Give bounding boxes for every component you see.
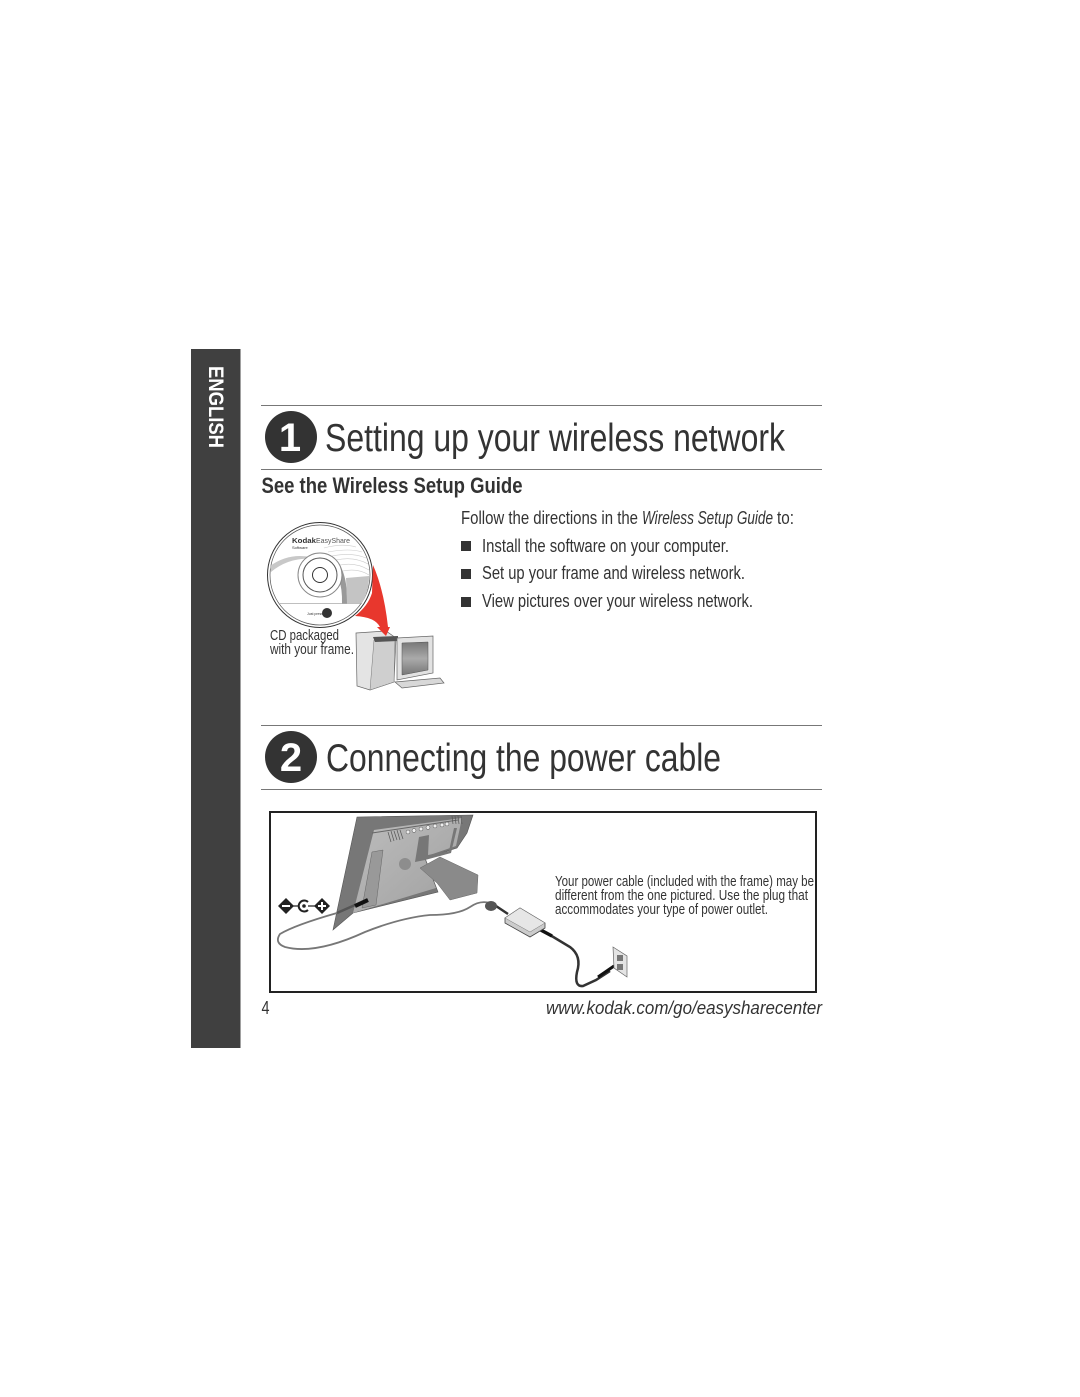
heading: step 1: 1 xyxy=(279,416,301,460)
hinge bracket xyxy=(415,828,457,862)
heading: step 1 xyxy=(265,411,785,463)
footer URL: www.kodak.com/go/easysharecenter xyxy=(546,997,823,1018)
icon: software CD: Software xyxy=(292,545,309,550)
icon: software CD: Just press xyxy=(307,612,323,616)
wall outlet xyxy=(613,947,627,977)
sidebar: language tab xyxy=(191,349,240,1048)
arrow: CD to computer xyxy=(355,565,390,636)
icon: computer xyxy=(356,631,444,690)
frame back xyxy=(333,815,478,930)
text block: directions list: View pictures over your wireless network. xyxy=(482,591,753,611)
heading: step 1: Setting up your wireless network xyxy=(325,417,785,460)
subheading: See the Wireless Setup Guide xyxy=(262,473,522,498)
caption: CD: with your frame. xyxy=(269,642,354,658)
icon: software CD: EasyShare xyxy=(316,536,350,545)
page number: 4 xyxy=(262,998,270,1018)
text block: directions list: Set up your frame and wireless network. xyxy=(482,563,745,583)
caption: CD xyxy=(269,628,354,658)
icon: software CD: Kodak xyxy=(292,536,317,545)
note: power cable: different from the one pictured. Use the plug that xyxy=(555,888,808,904)
icon: software CD xyxy=(268,522,372,628)
heading: step 2: 2 xyxy=(280,736,302,780)
power cable xyxy=(278,900,614,986)
note: power cable: Your power cable (included with the frame) may be xyxy=(555,874,814,890)
heading: step 2: Connecting the power cable xyxy=(326,737,721,780)
text block: directions list: Install the software on your computer. xyxy=(482,536,729,556)
text block: directions list xyxy=(461,508,794,611)
sidebar: language tab: ENGLISH xyxy=(204,366,227,448)
note: power cable xyxy=(555,874,814,918)
text block: directions list: to: xyxy=(777,508,794,528)
panel: power cable illustration xyxy=(270,812,816,992)
text block: directions list: Follow the directions in the xyxy=(461,508,638,528)
icon: polarity symbol xyxy=(278,898,330,914)
heading: step 2 xyxy=(265,731,721,783)
text block: directions list: Wireless Setup Guide xyxy=(642,508,773,528)
caption: CD: CD packaged xyxy=(270,628,339,644)
note: power cable: accommodates your type of power outlet. xyxy=(555,902,768,918)
power adapter xyxy=(505,908,545,937)
